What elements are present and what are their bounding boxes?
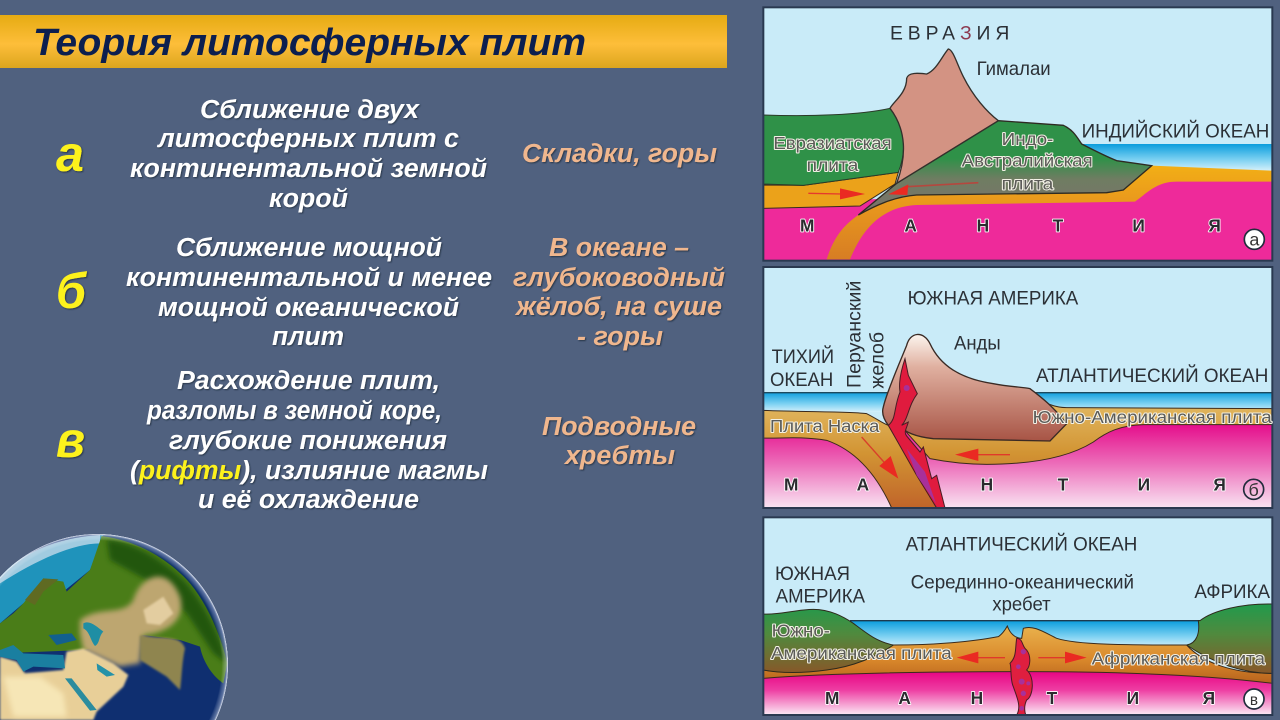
African continent — [1187, 604, 1272, 673]
labels: ЮЖНАЯ АМЕРИКА — [908, 288, 1078, 309]
labels: ЮЖНАЯ — [775, 564, 850, 585]
row а: description — [130, 96, 487, 213]
pale plateau — [143, 597, 173, 625]
Scandinavia — [25, 578, 58, 605]
ocean water — [1082, 144, 1272, 171]
sky — [763, 517, 1272, 715]
mantle letters: Я — [1203, 688, 1215, 708]
South American continent — [763, 609, 893, 672]
row б: description — [126, 234, 492, 351]
labels: Серединно-океанический — [911, 573, 1134, 594]
row б: result: жёлоб, на суше — [514, 293, 722, 321]
mantle — [763, 180, 1272, 261]
Black Sea — [48, 633, 77, 645]
mantle letters: Т — [1047, 688, 1058, 708]
labels — [771, 532, 1270, 668]
row а: description: корой — [269, 185, 348, 213]
mantle letters — [784, 474, 1226, 494]
row а: label: а — [56, 126, 84, 182]
badge а — [1244, 229, 1264, 249]
row в: result — [542, 413, 696, 470]
mantle letters: И — [1138, 474, 1150, 494]
mantle letters: Н — [971, 688, 983, 708]
labels: Индо- — [1002, 129, 1053, 149]
mantle letters: Я — [1208, 216, 1221, 236]
mantle letters: Т — [1058, 474, 1069, 494]
labels: АТЛАНТИЧЕСКИЙ ОКЕАН — [1036, 363, 1268, 387]
darker northern forest — [107, 540, 227, 663]
mantle — [763, 672, 1272, 715]
sky — [763, 267, 1272, 508]
Africa highlight — [3, 677, 67, 717]
frame — [763, 517, 1272, 715]
row б: result: В океане – — [549, 234, 689, 262]
sky — [763, 7, 1272, 261]
row в: result: хребты — [563, 442, 675, 470]
labels: хребет — [992, 595, 1051, 616]
mantle letters: И — [1127, 688, 1139, 708]
row в: description: глубокие понижения — [169, 427, 447, 455]
row б: description: Сближение мощной — [176, 234, 442, 262]
Eurasia green land — [0, 536, 227, 683]
mantle letters: М — [825, 688, 839, 708]
Red Sea — [65, 678, 97, 711]
row в: result: Подводные — [542, 413, 696, 441]
badge в: в — [1250, 692, 1258, 709]
arrow left — [955, 449, 1010, 461]
frame — [763, 267, 1272, 508]
arrow right — [808, 188, 865, 199]
magma conduit — [888, 359, 945, 508]
row а: description: литосферных плит с — [156, 125, 459, 153]
arrow left — [888, 183, 978, 195]
mantle letters: А — [904, 216, 917, 236]
labels: АТЛАНТИЧЕСКИЙ ОКЕАН — [906, 532, 1137, 556]
labels: плита — [1002, 173, 1053, 193]
labels: ЕВРАЗИЯ — [890, 23, 1009, 44]
South American plate — [903, 394, 1272, 464]
badge в — [1244, 689, 1264, 709]
row б: label: б — [56, 263, 88, 319]
labels — [773, 23, 1269, 193]
limb highlight — [0, 534, 228, 720]
badge б — [1244, 479, 1264, 500]
oceanic crust — [763, 626, 1272, 683]
labels: Южно-Американская плита — [1033, 407, 1272, 427]
India green-brown — [140, 635, 185, 690]
arctic sea — [0, 535, 103, 623]
mantle letters: Т — [1053, 216, 1064, 236]
mantle letters: А — [857, 474, 870, 494]
Eurasian plate green — [763, 108, 904, 185]
labels: ТИХИЙ — [772, 344, 834, 368]
labels: ИНДИЙСКИЙ ОКЕАН — [1082, 119, 1269, 143]
badge а: а — [1249, 229, 1259, 249]
magma conduit — [1010, 638, 1032, 715]
labels: Анды — [954, 333, 1001, 354]
labels: Африканская плита — [1092, 648, 1265, 668]
mantle — [763, 425, 1272, 508]
Caspian Sea — [83, 622, 103, 646]
row б: result — [513, 234, 725, 351]
row в: description — [130, 367, 488, 514]
Mediterranean — [0, 645, 65, 672]
diagram а: collision of continental plates — [763, 7, 1272, 261]
mantle letters — [800, 216, 1221, 236]
ocean water — [763, 392, 1272, 412]
row а: description: Сближение двух — [200, 96, 421, 124]
labels: Австралийская — [962, 151, 1093, 171]
row б: description: плит — [272, 323, 344, 351]
Nazca plate — [763, 410, 937, 508]
mantle letters: Я — [1213, 474, 1226, 494]
tan central Asia — [80, 577, 181, 667]
arrow left — [957, 652, 1005, 663]
labels: АФРИКА — [1194, 582, 1270, 603]
mantle letters: А — [898, 688, 911, 708]
diagram в: divergence of plates — [763, 517, 1272, 715]
row б: description: мощной океанической — [158, 294, 459, 322]
row в: label: в — [56, 412, 85, 468]
labels: Перуанский — [845, 281, 866, 388]
Indo-Australian orange layer — [827, 166, 1272, 259]
mantle letters: Н — [977, 216, 989, 236]
labels: Евразиатская — [773, 133, 892, 153]
arrow right — [1038, 652, 1087, 663]
Andes mountain — [883, 334, 1067, 441]
title banner — [0, 15, 727, 68]
row а: description: континентальной земной — [130, 155, 487, 183]
diagram б: continental and oceanic plates — [763, 267, 1272, 508]
badge б: б — [1249, 480, 1259, 500]
arrow down — [862, 437, 898, 479]
Himalaya mountain — [890, 49, 998, 183]
labels: желоб — [867, 332, 888, 389]
row б: result: глубоководный — [513, 264, 725, 292]
mantle letters: М — [784, 474, 798, 494]
title banner: Теория литосферных плит — [33, 22, 586, 64]
Eurasian orange layer — [763, 172, 898, 208]
arctic ice — [0, 535, 100, 583]
Indo-Australian plate — [858, 121, 1152, 215]
row б: result: - горы — [577, 323, 663, 351]
row в: description: и её охлаждение — [198, 486, 419, 514]
labels: Плита Наска — [770, 416, 879, 436]
icon: Earth globe — [0, 533, 230, 720]
mantle letters: И — [1132, 216, 1145, 236]
mantle letters — [825, 688, 1215, 708]
labels: плита — [807, 155, 858, 175]
labels — [770, 281, 1272, 436]
mantle letters: Н — [981, 474, 993, 494]
Africa and Arabia — [0, 648, 128, 720]
mantle letters: М — [800, 216, 814, 236]
labels: Американская плита — [771, 643, 952, 663]
labels: АМЕРИКА — [776, 587, 865, 608]
row в: description: Расхождение плит, — [177, 367, 440, 395]
row а: result: Складки, горы — [522, 140, 717, 168]
labels: ОКЕАН — [770, 370, 833, 391]
frame — [763, 7, 1272, 261]
Persian Gulf — [97, 663, 115, 677]
ocean water — [847, 621, 1200, 647]
labels: Южно- — [772, 621, 830, 641]
labels: Гималаи — [977, 59, 1051, 80]
row в: description: разломы в земной коре, — [146, 397, 442, 425]
row в: description: (рифты), излияние магмы — [130, 457, 488, 485]
row б: description: континентальной и менее — [126, 264, 492, 292]
